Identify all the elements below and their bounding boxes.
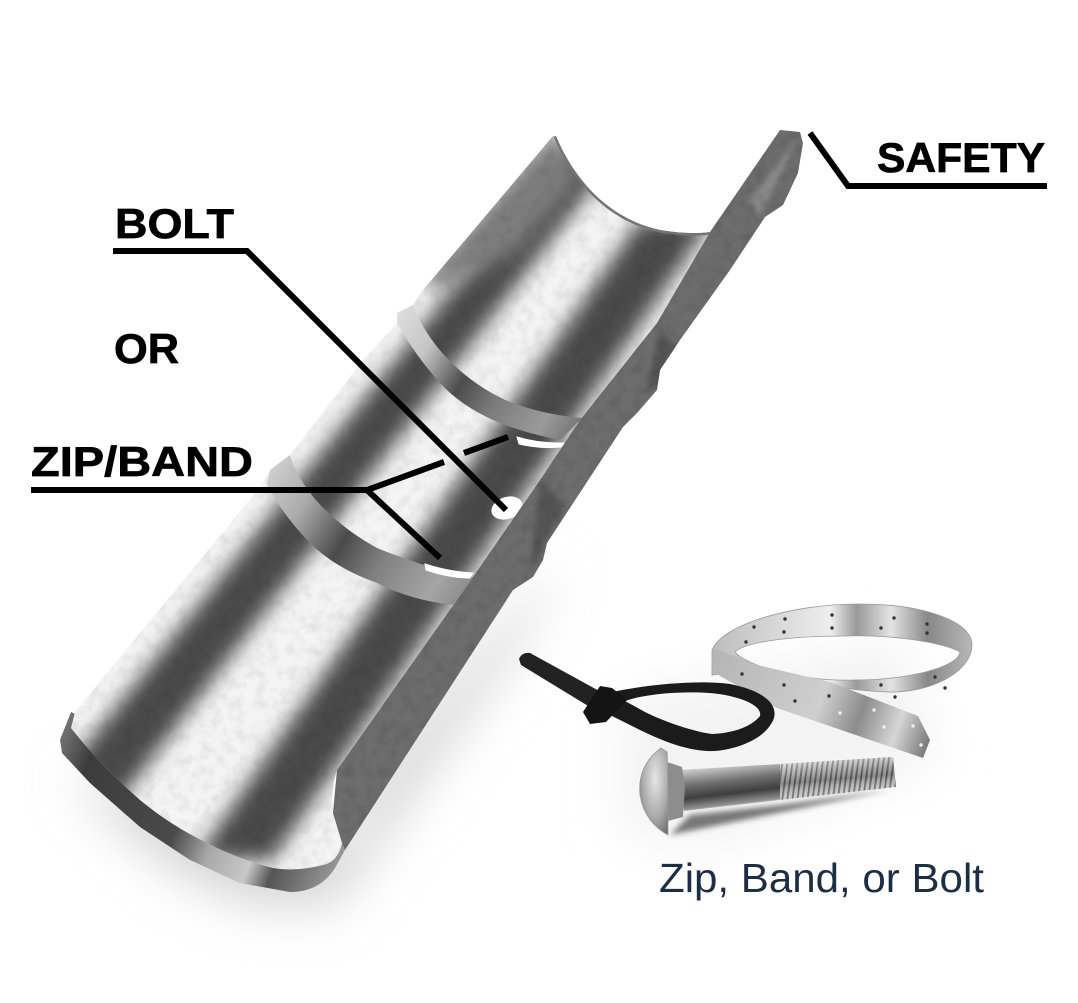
bolt dome head [640, 748, 668, 835]
safety pipe [34, 120, 810, 892]
icon: metal strap band [712, 604, 972, 758]
upper band slot [517, 437, 566, 448]
pipe bottom lip [60, 712, 345, 892]
strap tail [713, 648, 930, 758]
pipe cast shadow [70, 560, 560, 907]
strap coil [712, 604, 972, 692]
infographic: safety pipe fastening diagram [31, 130, 1047, 926]
upper rib [397, 305, 582, 440]
bolt thread shading [780, 757, 896, 800]
bolt thread [780, 757, 896, 800]
zip tie head [583, 686, 627, 724]
leader: safety [810, 133, 1047, 186]
zip tie loop [604, 682, 775, 751]
lower rib [267, 455, 473, 605]
label: SAFETY: SAFETY [877, 134, 1045, 181]
leader: bolt [113, 251, 506, 510]
pipe interior with metallic stripes [71, 136, 710, 870]
label: OR: OR [114, 325, 179, 372]
bolt shadow [670, 790, 890, 835]
pipe flange [330, 125, 810, 855]
bolt shank [680, 764, 780, 811]
zip tie tail [519, 653, 612, 712]
icon: carriage bolt [640, 748, 896, 835]
label: ZIP/BAND: ZIP/BAND [31, 438, 253, 485]
products shadow [620, 640, 940, 850]
leader: zip/band [31, 437, 508, 558]
bolt square neck [667, 762, 685, 821]
caption: Zip, Band, or Bolt [659, 855, 985, 901]
label: BOLT: BOLT [115, 200, 234, 247]
strap holes [740, 613, 947, 703]
lower band slot [425, 564, 473, 578]
icon: black zip tie [519, 653, 775, 751]
bolt hole [488, 493, 526, 523]
